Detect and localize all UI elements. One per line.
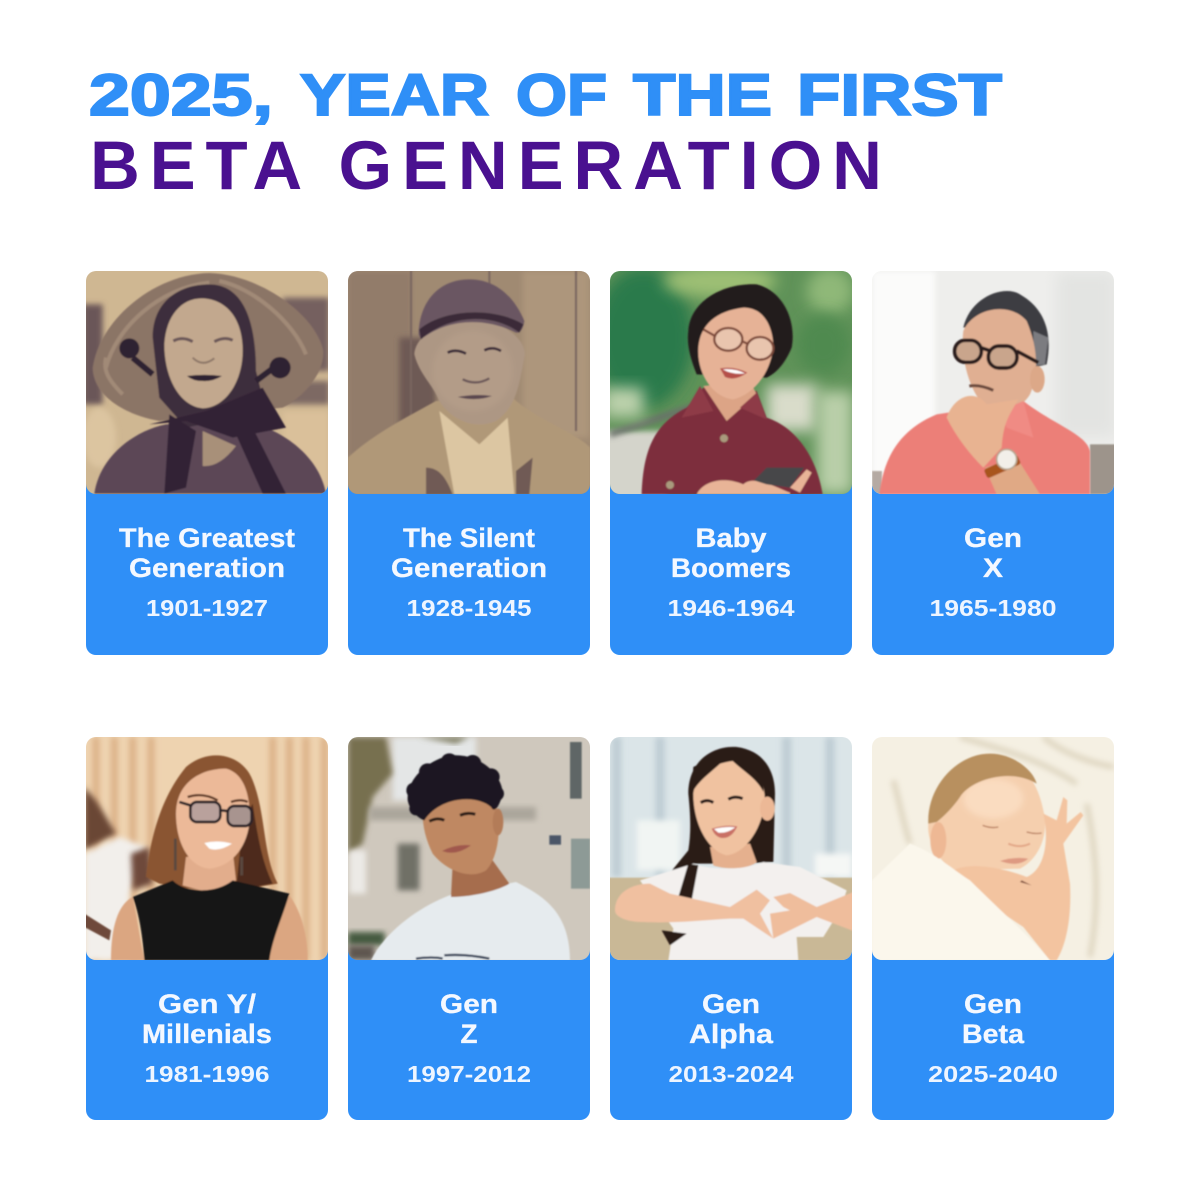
panel: The Greatest Generation: Generation bbox=[129, 553, 285, 583]
photo: girl making a heart with hands bbox=[608, 737, 855, 961]
title line 1 bbox=[89, 63, 1002, 128]
name: The Silent bbox=[403, 523, 535, 553]
photo: older woman with smartphone bbox=[610, 271, 852, 494]
photo: sleeping newborn in blanket bbox=[872, 737, 1115, 960]
name: The Greatest bbox=[119, 523, 295, 553]
title line 1: THE bbox=[633, 63, 772, 128]
photo: man in coral polo with glasses bbox=[872, 271, 1117, 494]
photo: woman in conical hat bbox=[83, 271, 329, 494]
years: 2013-2024 bbox=[668, 1061, 794, 1087]
years: 1997-2012 bbox=[407, 1061, 531, 1087]
title line 1: YEAR bbox=[300, 63, 489, 128]
panel: Gen Beta: Beta bbox=[962, 1019, 1025, 1049]
panel: Gen Alpha: Alpha bbox=[689, 1019, 774, 1049]
photo: young man with curly hair bbox=[348, 737, 591, 960]
title line 1: OF bbox=[516, 63, 607, 128]
name: Gen bbox=[702, 989, 760, 1019]
name: Gen bbox=[964, 523, 1022, 553]
panel: Baby Boomers bbox=[593, 264, 853, 655]
panel: Gen X bbox=[872, 271, 1117, 655]
panel: Gen Z: Z bbox=[460, 1019, 478, 1049]
panel: Gen Alpha bbox=[608, 737, 855, 1120]
panel: The Silent Generation: Generation bbox=[391, 553, 547, 583]
name: Gen bbox=[964, 989, 1022, 1019]
name: Gen Y/ bbox=[158, 989, 257, 1019]
name: Baby bbox=[696, 523, 766, 553]
title line 1: FIRST bbox=[797, 63, 1002, 128]
panel: Gen Z bbox=[348, 737, 591, 1120]
years: 1965-1980 bbox=[930, 595, 1056, 621]
years: 1901-1927 bbox=[146, 595, 268, 621]
title bbox=[89, 63, 1002, 204]
years: 2025-2040 bbox=[928, 1061, 1058, 1087]
panel: The Silent Generation bbox=[348, 271, 591, 655]
panel: Gen Beta bbox=[872, 737, 1115, 1120]
panel: Gen Y / Millenials bbox=[84, 737, 329, 1120]
panel: The Greatest Generation bbox=[83, 271, 329, 655]
panel: Baby Boomers: Boomers bbox=[671, 553, 791, 583]
panel: Gen X: X bbox=[983, 553, 1003, 583]
title line 2: BETA GENERATION bbox=[90, 127, 882, 204]
years: 1981-1996 bbox=[144, 1061, 270, 1087]
years: 1946-1964 bbox=[668, 595, 795, 621]
photo: elderly man in flat cap bbox=[348, 271, 591, 494]
photo: young woman with glasses, black top bbox=[84, 737, 329, 960]
years: 1928-1945 bbox=[406, 595, 532, 621]
title line 1: 2025, bbox=[89, 63, 273, 128]
panel: Gen Y / Millenials: Millenials bbox=[142, 1019, 272, 1049]
name: Gen bbox=[440, 989, 498, 1019]
